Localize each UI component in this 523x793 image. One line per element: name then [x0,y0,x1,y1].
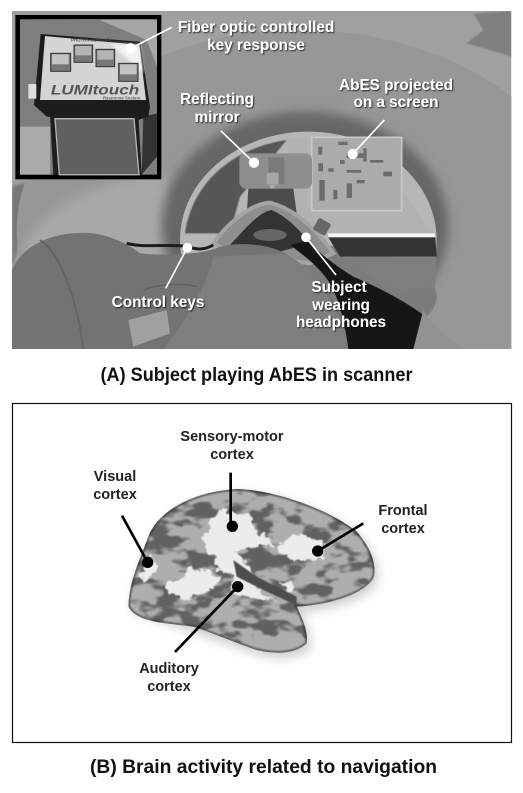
inset photo of LUMItouch key response: PHOTON CONTROL [71,37,113,42]
label: visual cortex: Visual [94,469,136,485]
label: auditory cortex: cortex [147,679,191,695]
caption A: (A) Subject playing AbES in scanner [100,365,413,386]
label: reflecting mirror: mirror [194,109,240,126]
dark glove [291,241,423,349]
label: sensory-motor cortex: Sensory-motor [180,429,284,445]
label: fiber optic controlled key response: Fiber optic controlled [178,19,334,36]
callout lines and dots [126,27,384,288]
label: control keys: Control keys [112,294,204,311]
label: reflecting mirror: Reflecting [180,91,254,108]
lower bore [328,233,435,237]
handle [50,115,142,175]
label: subject wearing headphones: Subject [311,279,367,296]
label: AbES projected on a screen: on a screen [353,94,439,111]
label: subject wearing headphones: headphones [296,314,386,331]
response box [34,34,150,124]
scanner bore face [16,30,512,349]
label: AbES projected on a screen: AbES projected [339,77,453,94]
label: auditory cortex: Auditory [139,661,199,677]
mirror [239,153,312,189]
panel: brain activity box [12,404,512,742]
inset photo of LUMItouch key response: Response System [103,96,140,101]
label: fiber optic controlled key response: key response [207,37,305,54]
LUMItouch logo: LUMItouch [51,81,139,97]
brain map [122,473,383,660]
screen maze pattern [318,142,392,201]
panel: photo of subject playing AbES in scanner [12,11,512,349]
label: subject wearing headphones: wearing [311,297,370,314]
projected screen [287,137,430,233]
lateral sulcus [233,560,297,605]
label: frontal cortex: Frontal [378,503,428,519]
cortex base [123,487,380,657]
subject clothing [12,233,350,349]
label: frontal cortex: cortex [381,521,425,537]
shaded rim [128,489,375,653]
caption B: (B) Brain activity related to navigation [90,757,437,778]
pointer lines and dots [122,473,363,652]
inset photo of LUMItouch key response [15,15,161,179]
label: sensory-motor cortex: cortex [210,447,254,463]
label: visual cortex: cortex [93,487,137,503]
photo background [12,11,511,349]
head coil [213,203,333,263]
dark sulci patches [128,489,374,652]
active white regions [142,510,323,600]
keys [51,53,71,71]
control key cable [127,243,213,249]
bore interior [180,132,437,257]
